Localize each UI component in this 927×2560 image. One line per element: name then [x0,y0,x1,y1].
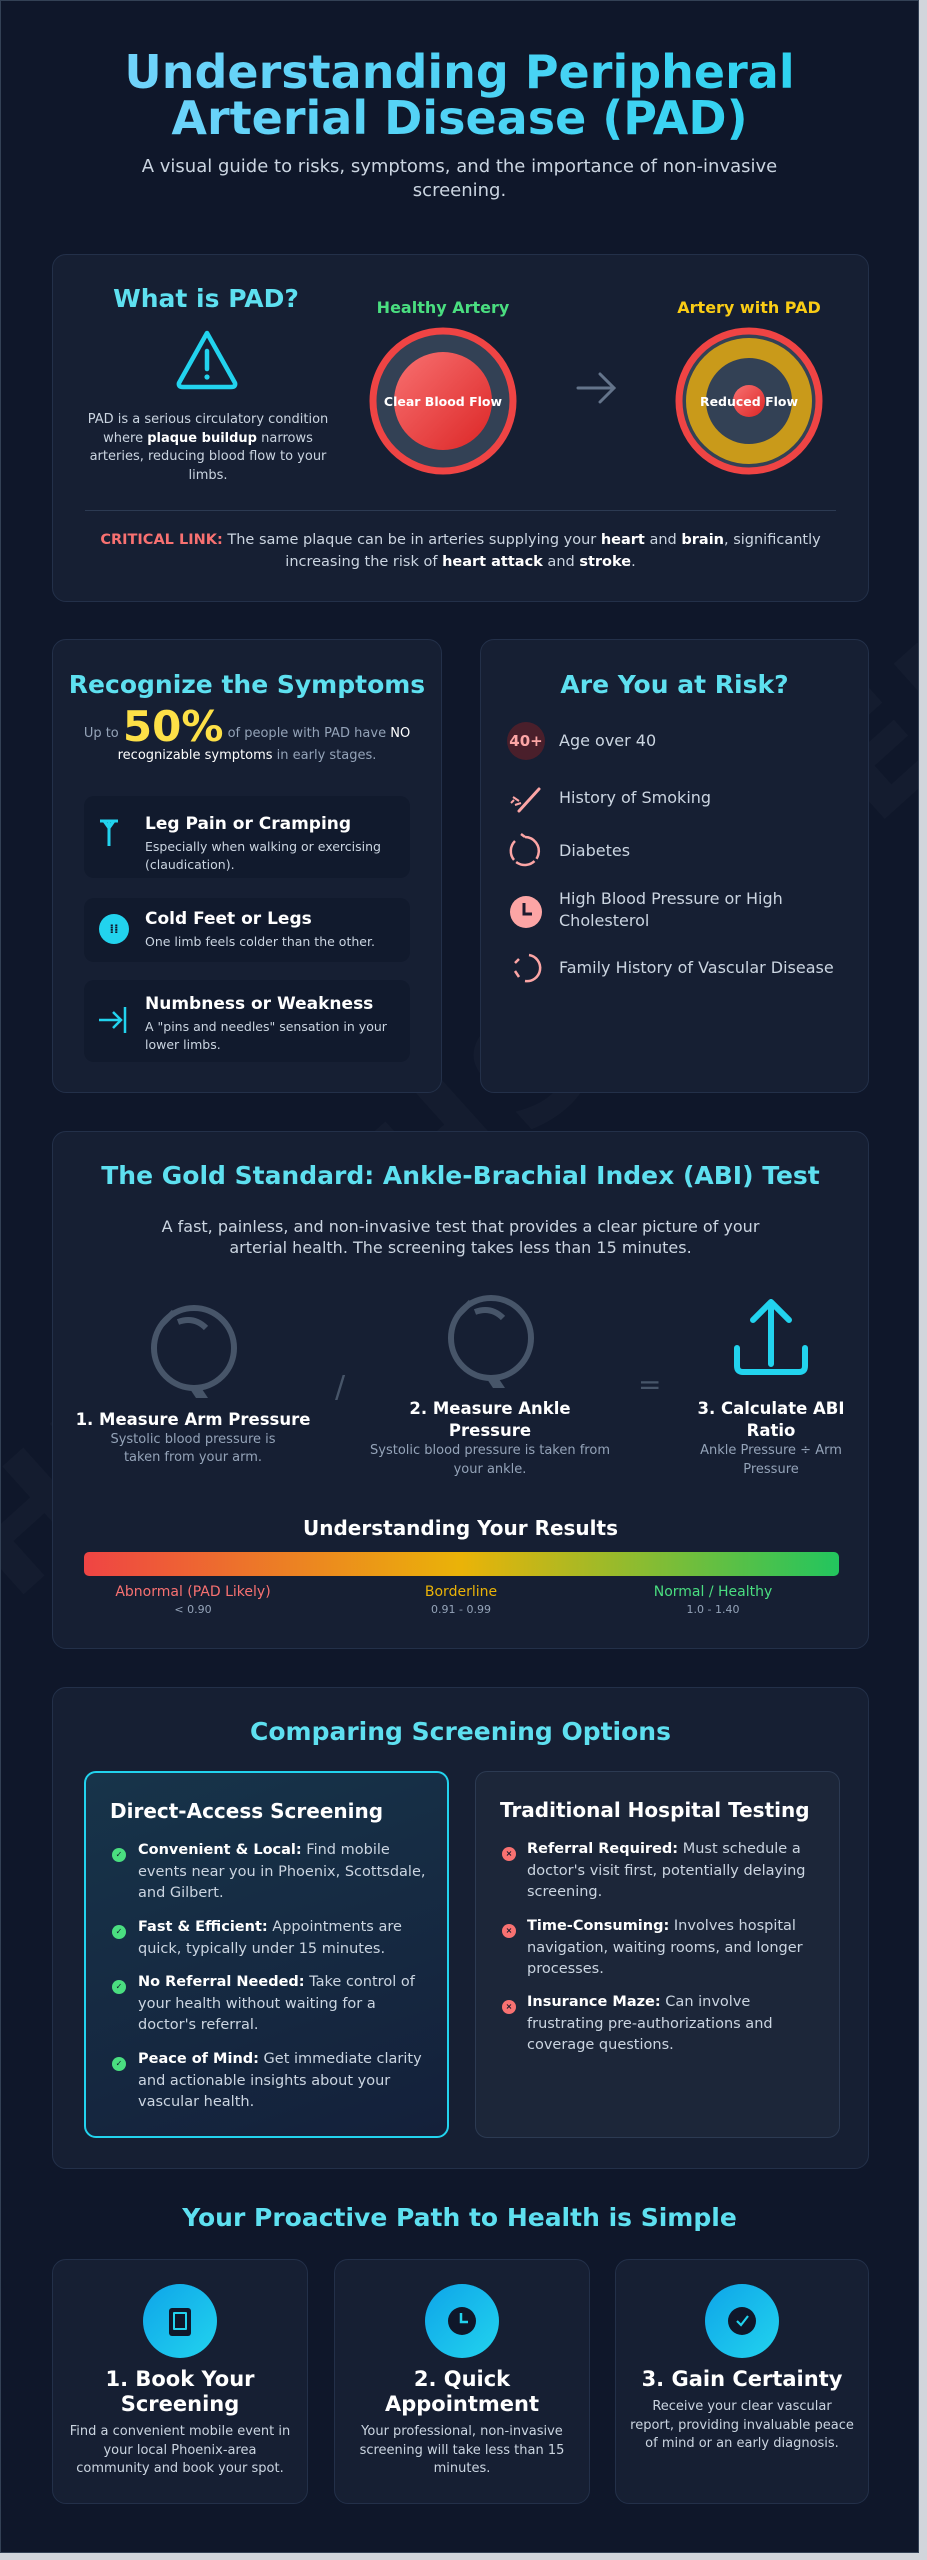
card: traditional hospital: Insurance Maze: Can involve frustrating pre-authorizations and coverage questions. [527,1994,773,2053]
item: peace of mind [112,2057,126,2071]
title: Arterial Disease (PAD) [171,91,748,145]
stat: 50%: Up to 50% of people with PAD have NO recognizable symptoms in early stages. [84,702,410,763]
icon: numbness arrow [99,1007,126,1033]
icon: cuff [448,1295,534,1388]
card: traditional hospital: Traditional Hospital Testing [500,1798,810,1822]
icon: clock [425,2284,499,2358]
step card: appointment: 2. Quick [414,2367,510,2391]
risk: age: Age over 40 [559,731,656,750]
card: direct-access: Fast & Efficient: Appointments are quick, typically under 15 minutes. [138,1919,402,1956]
step 2: ankle pressure [370,1295,610,1476]
step 2: ankle pressure: 2. Measure Ankle [409,1399,571,1418]
icon: warning triangle [176,330,238,390]
item: no referral: ✓ [116,1982,122,1991]
icon: diabetes [510,833,540,866]
symptom: cold feet: Cold Feet or Legs [145,909,312,929]
card: traditional hospital: Referral Required: Must schedule a doctor's visit first, potentially delaying screening. [527,1841,806,1900]
text: PAD description: PAD is a serious circulatory condition where plaque buildup narrows arteries, reducing blood flow to your limbs. [88,412,328,482]
legend: normal: Normal / Healthy [654,1584,772,1600]
icon: cigarette [510,787,541,813]
arrow [576,372,616,404]
item: referral required: × [506,1849,512,1858]
step 1: arm pressure: 1. Measure Arm Pressure [76,1410,310,1429]
text: ABI description: A fast, painless, and non-invasive test that provides a clear picture of your arterial health. The screening takes less than 15 minutes. [162,1217,759,1257]
step 2: ankle pressure: Systolic blood pressure is taken from your ankle. [370,1443,610,1476]
icon: upload arrow [734,1299,808,1375]
heading: symptoms: Recognize the Symptoms [69,670,425,699]
step card: certainty: Receive your clear vascular report, providing invaluable peace of mind or an early diagnosis. [630,2399,854,2451]
legend: normal: 1.0 - 1.40 [687,1603,739,1616]
symptom: numbness: A "pins and needles" sensation in your lower limbs. [145,1019,387,1052]
item: convenient: ✓ [116,1850,122,1859]
diagram: artery with PAD [676,328,822,474]
symptom: numbness [84,980,410,1062]
card: direct-access: Direct-Access Screening [110,1799,383,1823]
risk: blood pressure: Cholesterol [559,911,649,930]
step card: appointment [334,2259,590,2504]
step 1: arm pressure [76,1305,310,1465]
symptom: numbness: Numbness or Weakness [145,994,373,1014]
step card: certainty [615,2259,869,2504]
risk: smoking [510,787,711,813]
card: direct-access [84,1771,449,2138]
risk: diabetes: Diabetes [559,841,630,860]
step 1: arm pressure: Systolic blood pressure is taken from your arm. [110,1432,276,1465]
panel: ABI test [52,1131,869,1649]
diagram: healthy artery [370,328,516,474]
icon: 40+: 40+ [509,732,543,750]
callout: critical link: CRITICAL LINK: The same plaque can be in arteries supplying your heart and brain, significantly increasing the risk of heart attack and stroke. [100,532,821,570]
icon: tablet [143,2284,217,2358]
heading: comparing: Comparing Screening Options [250,1717,671,1746]
symptom: leg pain: Especially when walking or exercising (claudication). [145,839,381,872]
step card: certainty: 3. Gain Certainty [642,2367,842,2391]
risk: blood pressure: High Blood Pressure or High [559,889,783,908]
legend: abnormal: < 0.90 [174,1603,212,1616]
card: traditional hospital [475,1771,840,2138]
symptom: cold feet: One limb feels colder than the other. [145,934,375,949]
title: Understanding Peripheral [124,45,795,99]
risk: smoking: History of Smoking [559,788,711,807]
heading: ABI: The Gold Standard: Ankle-Brachial Index (ABI) Test [101,1161,820,1190]
legend: borderline: Borderline [425,1584,497,1600]
step card: appointment: Your professional, non-invasive screening will take less than 15 minutes. [360,2424,564,2476]
card: direct-access: Peace of Mind: Get immediate clarity and actionable insights about your vascular health. [138,2051,422,2110]
icon: leg pain [100,820,118,846]
legend: abnormal: Abnormal (PAD Likely) [115,1584,271,1600]
step card: book [52,2259,308,2504]
icon: family [514,954,542,982]
item: fast: ✓ [116,1927,122,1936]
risk: family history: Family History of Vascular Disease [559,958,834,977]
risk: blood pressure [510,889,783,930]
symptom: cold feet [84,898,410,962]
heading: proactive path: Your Proactive Path to Health is Simple [182,2203,737,2232]
item: insurance maze [502,2000,516,2014]
step 2: ankle pressure: Pressure [449,1421,531,1440]
label: healthy artery: Healthy Artery [377,298,509,317]
risk: diabetes [510,833,630,866]
step 3: calculate: Ankle Pressure ÷ Arm Pressure [700,1443,842,1476]
item: insurance maze: × [506,2002,512,2011]
title [1,49,918,141]
symptom: leg pain: Leg Pain or Cramping [145,814,351,834]
panel: risk [480,639,869,1093]
icon: 40+ [507,722,545,760]
heading: what is PAD: What is PAD? [113,284,299,313]
legend: normal [654,1584,772,1616]
item: time-consuming [502,1924,516,1938]
item: fast [112,1925,126,1939]
operator: equals: = [638,1368,661,1401]
item: referral required [502,1847,516,1861]
icon: cold [99,914,129,944]
icon: cold: ⁞⁞ [109,922,119,936]
item: convenient [112,1848,126,1862]
risk: age [507,722,656,760]
item: peace of mind: ✓ [116,2059,122,2068]
step 3: calculate: 3. Calculate ABI [697,1399,845,1418]
legend: borderline: 0.91 - 0.99 [431,1603,491,1616]
risk: family history [514,954,834,982]
step card: book: 1. Book Your [105,2367,255,2391]
operator: divide: / [335,1370,345,1405]
symptom: leg pain [84,796,410,878]
diagram: healthy artery: Clear Blood Flow [384,394,503,409]
card: direct-access: No Referral Needed: Take control of your health without waiting for a doctor's referral. [138,1974,415,2033]
card: traditional hospital: Time-Consuming: Involves hospital navigation, waiting rooms, and longer processes. [527,1918,803,1977]
step 3: calculate: Ratio [747,1421,795,1440]
heading: results: Understanding Your Results [303,1516,618,1540]
legend: borderline [425,1584,497,1616]
chart: ABI gradient bar [84,1552,839,1576]
card: direct-access: Convenient & Local: Find mobile events near you in Phoenix, Scottsdale, and Gilbert. [138,1842,425,1901]
panel: symptoms [52,639,442,1093]
icon: check [705,2284,779,2358]
label: artery with PAD: Artery with PAD [677,298,821,317]
step card: book: Screening [121,2392,239,2416]
step 3: calculate [697,1299,845,1476]
legend: abnormal [115,1584,271,1616]
panel: what is PAD [52,254,869,602]
icon: clock [510,896,542,928]
step card: appointment: Appointment [385,2392,539,2416]
heading: risk: Are You at Risk? [560,670,789,699]
panel: comparing screening options [52,1687,869,2169]
diagram: artery with PAD: Reduced Flow [700,394,798,409]
item: no referral [112,1980,126,1994]
item: time-consuming: × [506,1926,512,1935]
icon: cuff [151,1305,237,1398]
subtitle: A visual guide to risks, symptoms, and the importance of non-invasive screening. [142,156,777,201]
step card: book: Find a convenient mobile event in your local Phoenix-area community and book your spot. [70,2424,290,2476]
